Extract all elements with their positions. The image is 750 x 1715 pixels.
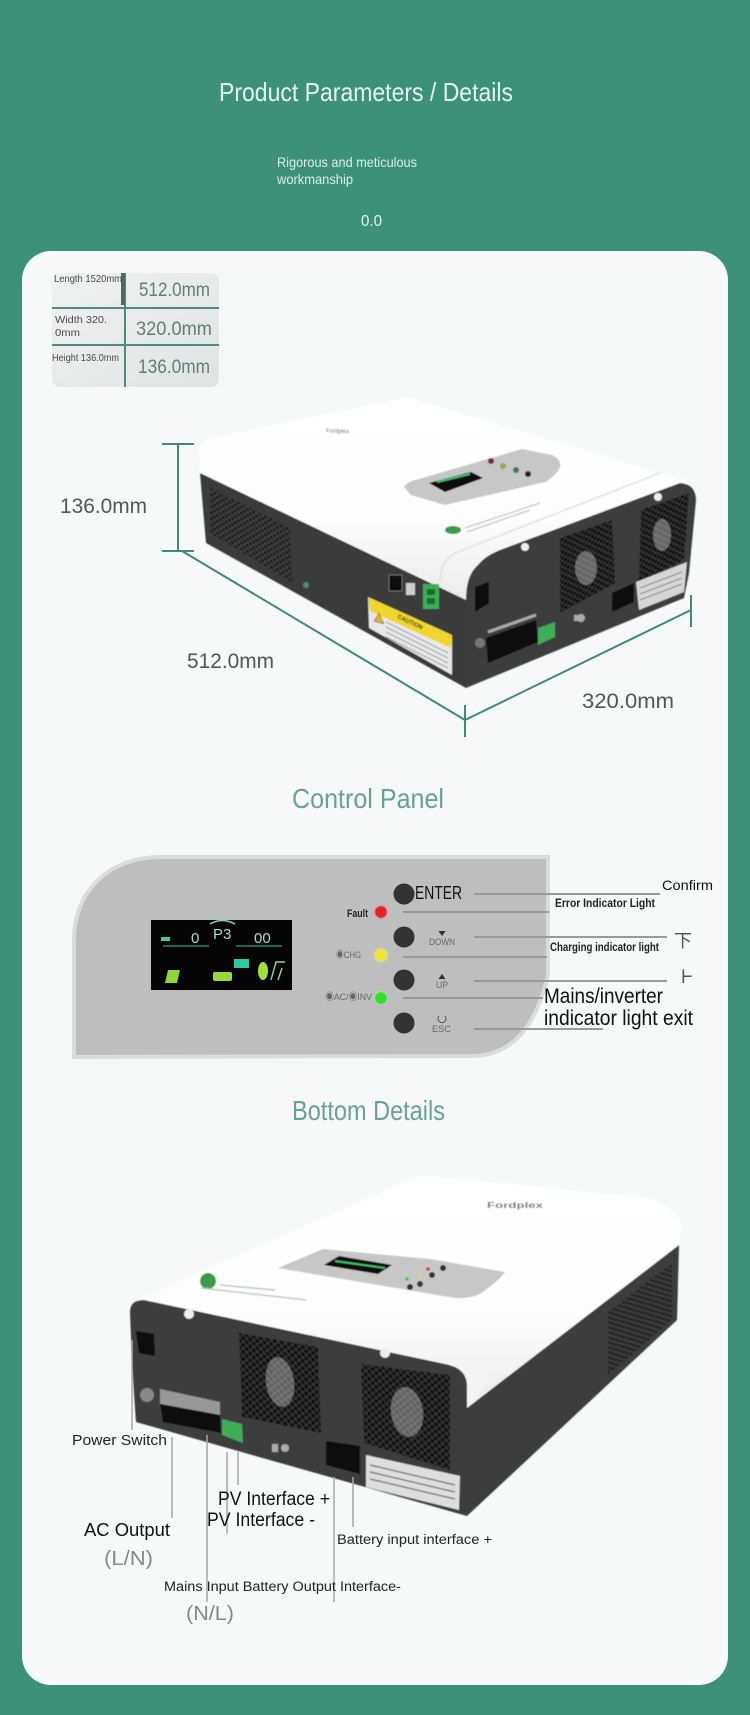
label: PV interface plus: PV Interface +: [218, 1489, 330, 1510]
button and light labels: UP: [436, 980, 448, 991]
inverter rear panel: [130, 1300, 467, 1516]
heading: control panel: Control Panel: [292, 783, 444, 814]
brand logo: [445, 503, 540, 534]
callout text: [544, 877, 713, 1030]
dimensions table: Width 320.: [55, 315, 107, 326]
cover seam: [440, 473, 660, 582]
button and light labels: DOWN: [429, 937, 455, 948]
version value: 0.0: [361, 213, 382, 230]
callout text: Mains/inverter: [544, 985, 663, 1008]
dimensions table: Height 136.0mm: [52, 353, 119, 364]
dimensions table: 136.0mm: [138, 357, 210, 378]
control panel on top: [278, 1249, 505, 1298]
LCD screen: 00: [254, 930, 271, 947]
caution label: CAUTION: [396, 614, 423, 631]
label: L/N: (L/N): [104, 1548, 153, 1570]
ENTER label: ENTER: [415, 883, 462, 903]
dimensions table: 0mm: [55, 328, 80, 339]
brand text: Fordplex: [487, 1201, 544, 1210]
callout text: 下: [674, 931, 692, 951]
dimensions table: 320.0mm: [136, 319, 212, 340]
callout text: Charging indicator light: [550, 942, 659, 954]
dimensions table: [52, 273, 219, 387]
dimensions table: Length 1520mm: [54, 274, 122, 285]
button and light labels: [325, 908, 455, 1035]
LCD screen: [151, 920, 292, 990]
dimension lines: [162, 444, 691, 737]
panel: white card: [22, 251, 728, 1685]
label: power switch: Power Switch: [72, 1432, 167, 1449]
callout text: indicator light exit: [544, 1007, 693, 1030]
LCD screen: 0: [191, 930, 199, 947]
panel body: [74, 857, 548, 1057]
subtitle: Rigorous and meticulous: [277, 154, 417, 170]
inverter top cover: [199, 397, 696, 600]
subtitle: workmanship: [276, 171, 353, 187]
buttons: [394, 884, 414, 1034]
inverter long side: [200, 473, 466, 688]
control panel diagram: [74, 857, 548, 1057]
LCD screen: P3: [213, 926, 231, 943]
callout lines: [403, 894, 667, 1029]
callout lines: [132, 1340, 353, 1602]
brand logo: [200, 1273, 306, 1300]
label: length: 512.0mm: [187, 650, 274, 673]
button and light labels: ◉AC/◉INV: [325, 992, 373, 1003]
button and light labels: Fault: [347, 908, 368, 920]
label: N/L: (N/L): [186, 1603, 234, 1625]
inverter top cover: [130, 1175, 682, 1408]
label: width: 320.0mm: [582, 690, 674, 713]
callout text: 上: [674, 968, 694, 991]
subtitle: [276, 154, 417, 187]
inverter long side: [467, 1245, 679, 1516]
heading: bottom details: Bottom Details: [292, 1095, 445, 1126]
white corner wrap: [445, 1358, 488, 1410]
product image: inverter front view: [199, 397, 696, 688]
label: PV interface minus: PV Interface -: [207, 1510, 315, 1531]
brand text: Fordplex: [326, 428, 349, 435]
label: mains input and battery output: Mains Input Battery Output Interface-: [164, 1579, 401, 1594]
indicator lights: [374, 906, 388, 1004]
button and light labels: ESC: [432, 1024, 451, 1035]
label: height: 136.0mm: [60, 495, 147, 518]
inverter rear panel: [466, 483, 696, 688]
label: AC output: AC Output: [84, 1520, 170, 1540]
callout text: Confirm: [662, 877, 713, 893]
caution label: [368, 597, 452, 675]
dimensions table: 512.0mm: [139, 280, 210, 301]
button and light labels: ◉CHG: [336, 950, 361, 961]
title: Product Parameters / Details: [219, 77, 513, 107]
product image: inverter rear view: [130, 1175, 682, 1516]
callout text: Error Indicator Light: [555, 898, 655, 910]
control panel on top: [404, 449, 560, 505]
label: battery input: Battery input interface +: [337, 1532, 492, 1547]
